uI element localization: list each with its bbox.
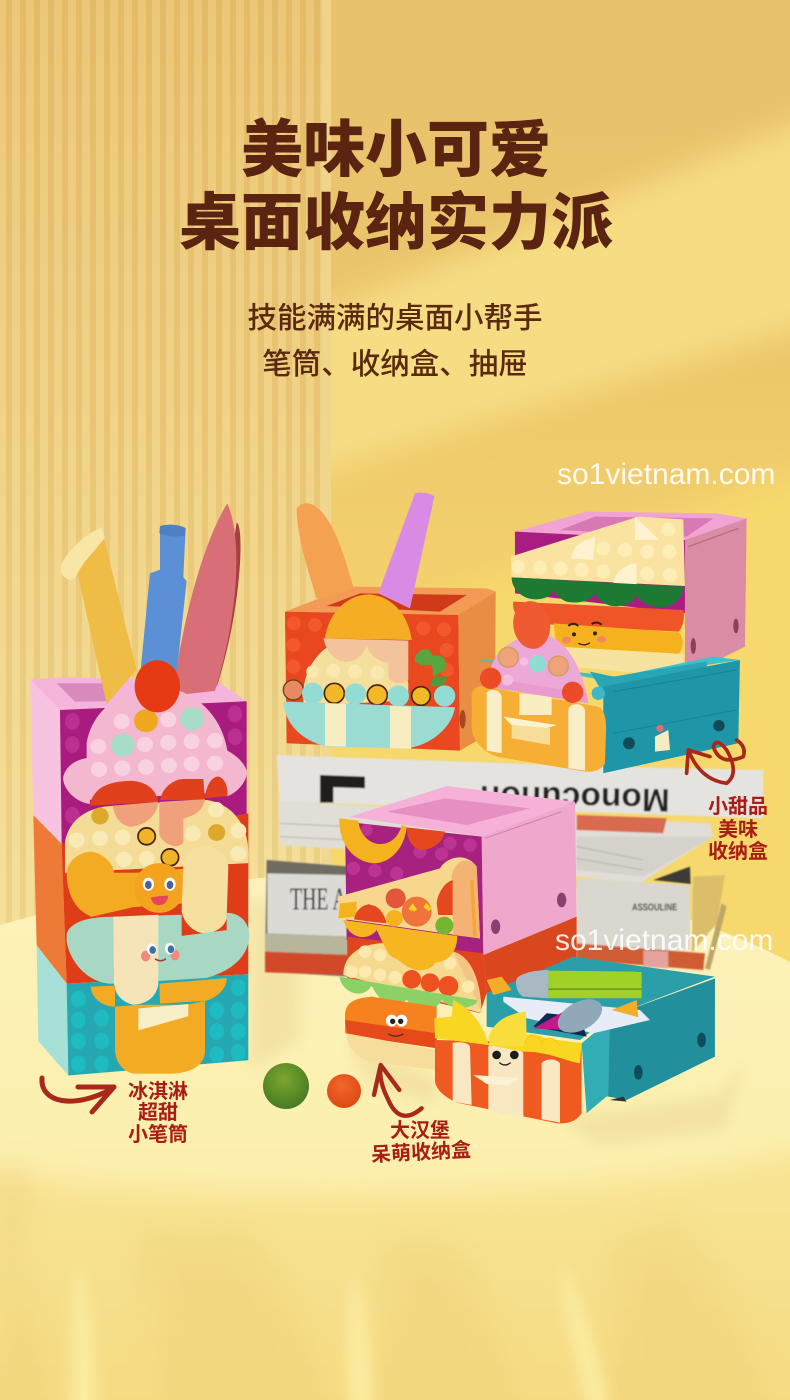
pens [61, 503, 240, 704]
background wall [0, 0, 790, 1040]
product: sandwich and cake stacked boxes [472, 512, 747, 773]
book: top Monocle [277, 755, 763, 833]
marker pens [297, 493, 434, 608]
label: burger box: 大汉堡 [390, 1119, 450, 1142]
book: lower stack left: THE A [290, 881, 347, 916]
decorative balls [263, 1063, 361, 1109]
title: 桌面收纳实力派 [179, 189, 613, 258]
drawer body [487, 957, 715, 1113]
shadows on the cloth [248, 900, 745, 1145]
ice-cream scoop top [63, 660, 247, 804]
pizza slice [338, 857, 480, 938]
label: dessert box [708, 795, 768, 863]
title [179, 116, 613, 258]
subtitle: 笔筒、收纳盒、抽屉 [262, 348, 528, 381]
box top [350, 786, 575, 837]
subtitle [247, 302, 543, 381]
holder side face [30, 679, 62, 844]
popcorn drawer front [434, 1000, 582, 1123]
watermark: lower: so1vietnam.com [555, 924, 773, 957]
orange scallops [343, 920, 457, 970]
arrow: to burger box [374, 1065, 422, 1116]
label: dessert box: 小甜品 [708, 795, 768, 818]
book: lower stack left [265, 802, 727, 977]
label: pencil holder: 小笔筒 [128, 1123, 188, 1146]
ball: orange [327, 1074, 361, 1108]
arrow: to pencil holder [42, 1078, 114, 1112]
label: pencil holder: 冰淇淋 [128, 1080, 188, 1103]
label: burger box: 呆萌收纳盒 [370, 1137, 472, 1167]
book: lower stack left: ASSOULINE [632, 903, 678, 914]
holder front faces [60, 701, 247, 844]
label: dessert box: 美味 [718, 818, 758, 841]
box: cake drawer [472, 599, 740, 773]
popcorn face [492, 1051, 519, 1065]
ice-cream decoration [283, 594, 455, 749]
burger [339, 943, 482, 1070]
label: burger box [370, 1119, 472, 1167]
label: pencil holder: 超甜 [138, 1101, 178, 1124]
books behind the boxes [265, 755, 763, 977]
ball: green [263, 1063, 309, 1109]
book: top Monocle: Monocuhoh [479, 779, 670, 819]
label: dessert box: 收纳盒 [708, 839, 768, 863]
face [562, 622, 606, 645]
product: orange ice-cream box with pens [283, 493, 496, 751]
mint scoop [67, 913, 249, 1005]
orange face [143, 878, 176, 905]
title: 美味小可爱 [241, 116, 551, 185]
box: sandwich [511, 512, 747, 677]
cream cone middle [65, 777, 248, 933]
box sides [482, 802, 577, 955]
subtitle: 技能满满的桌面小帮手 [247, 302, 543, 335]
watermark: upper: so1vietnam.com [557, 458, 775, 491]
arrow: to dessert box [687, 740, 744, 783]
holder top [30, 678, 247, 710]
label: pencil holder [128, 1080, 188, 1146]
top rim [285, 587, 496, 615]
product: burger and pizza box with drawer [338, 786, 715, 1123]
arc and red decoration [339, 818, 445, 863]
product: ice-cream pencil holder [30, 503, 249, 1076]
drawer inside: note paper and lighter [487, 970, 650, 1040]
tablecloth [0, 872, 790, 1400]
orange popsicle base [91, 978, 227, 1074]
